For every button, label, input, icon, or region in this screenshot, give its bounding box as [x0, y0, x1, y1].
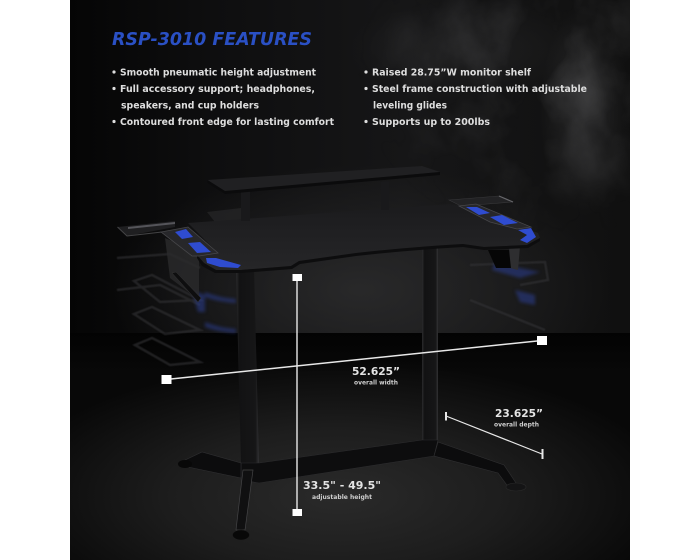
left leg — [236, 268, 259, 463]
right leg — [422, 246, 438, 458]
smoke — [392, 1, 630, 192]
blue LED accents — [175, 207, 536, 268]
feature list: left column: Contoured front edge for lasting comfort — [120, 117, 334, 128]
feature list: right column: leveling glides — [373, 100, 447, 112]
left headphone hook rail — [172, 272, 201, 302]
right under-desk hook — [488, 246, 520, 270]
dark background panel — [70, 0, 630, 560]
side bracket panel — [165, 238, 199, 300]
monitor shelf posts — [241, 181, 389, 221]
feature list: right column: Raised 28.75”W monitor shelf — [372, 68, 532, 78]
feature list: left column: Full accessory support; headphones, — [120, 84, 315, 95]
infographic canvas — [70, 0, 630, 560]
monitor shelf — [208, 166, 440, 194]
faint shelf reflection — [207, 208, 241, 222]
left tray — [118, 221, 175, 236]
feature list: right column: Supports up to 200lbs — [372, 117, 490, 128]
dimension: adjustable height — [292, 274, 381, 516]
crossbar — [241, 440, 438, 483]
right foot — [434, 442, 526, 491]
dimension: adjustable height: adjustable height — [312, 493, 372, 501]
right tray — [449, 196, 513, 206]
desk — [118, 166, 540, 540]
feature list: right column: Steel frame construction with adjustable — [372, 84, 587, 95]
right wing — [459, 204, 531, 229]
dimension: adjustable height: 33.5" - 49.5" — [303, 480, 381, 492]
dimension: overall depth: overall depth — [494, 420, 539, 428]
feature list: left column — [112, 68, 334, 128]
title: RSP-3010 FEATURES — [112, 30, 312, 50]
dimension: overall width — [162, 336, 547, 386]
dimension: overall width: 52.625” — [352, 366, 400, 378]
ghosted height-travel reflections — [117, 254, 548, 365]
dimension: overall width: overall width — [354, 378, 398, 386]
left foot — [178, 452, 253, 540]
desktop surface — [188, 204, 540, 270]
dimension: overall depth: 23.625” — [495, 408, 543, 420]
desk front edge — [197, 238, 540, 273]
left wing — [161, 227, 218, 256]
ghosted blue lights — [192, 262, 540, 333]
feature list: left column: Smooth pneumatic height adjustment — [120, 68, 316, 78]
feature list: right column — [364, 68, 587, 128]
feature list: left column: speakers, and cup holders — [121, 100, 259, 112]
dimension: overall depth — [446, 408, 543, 459]
